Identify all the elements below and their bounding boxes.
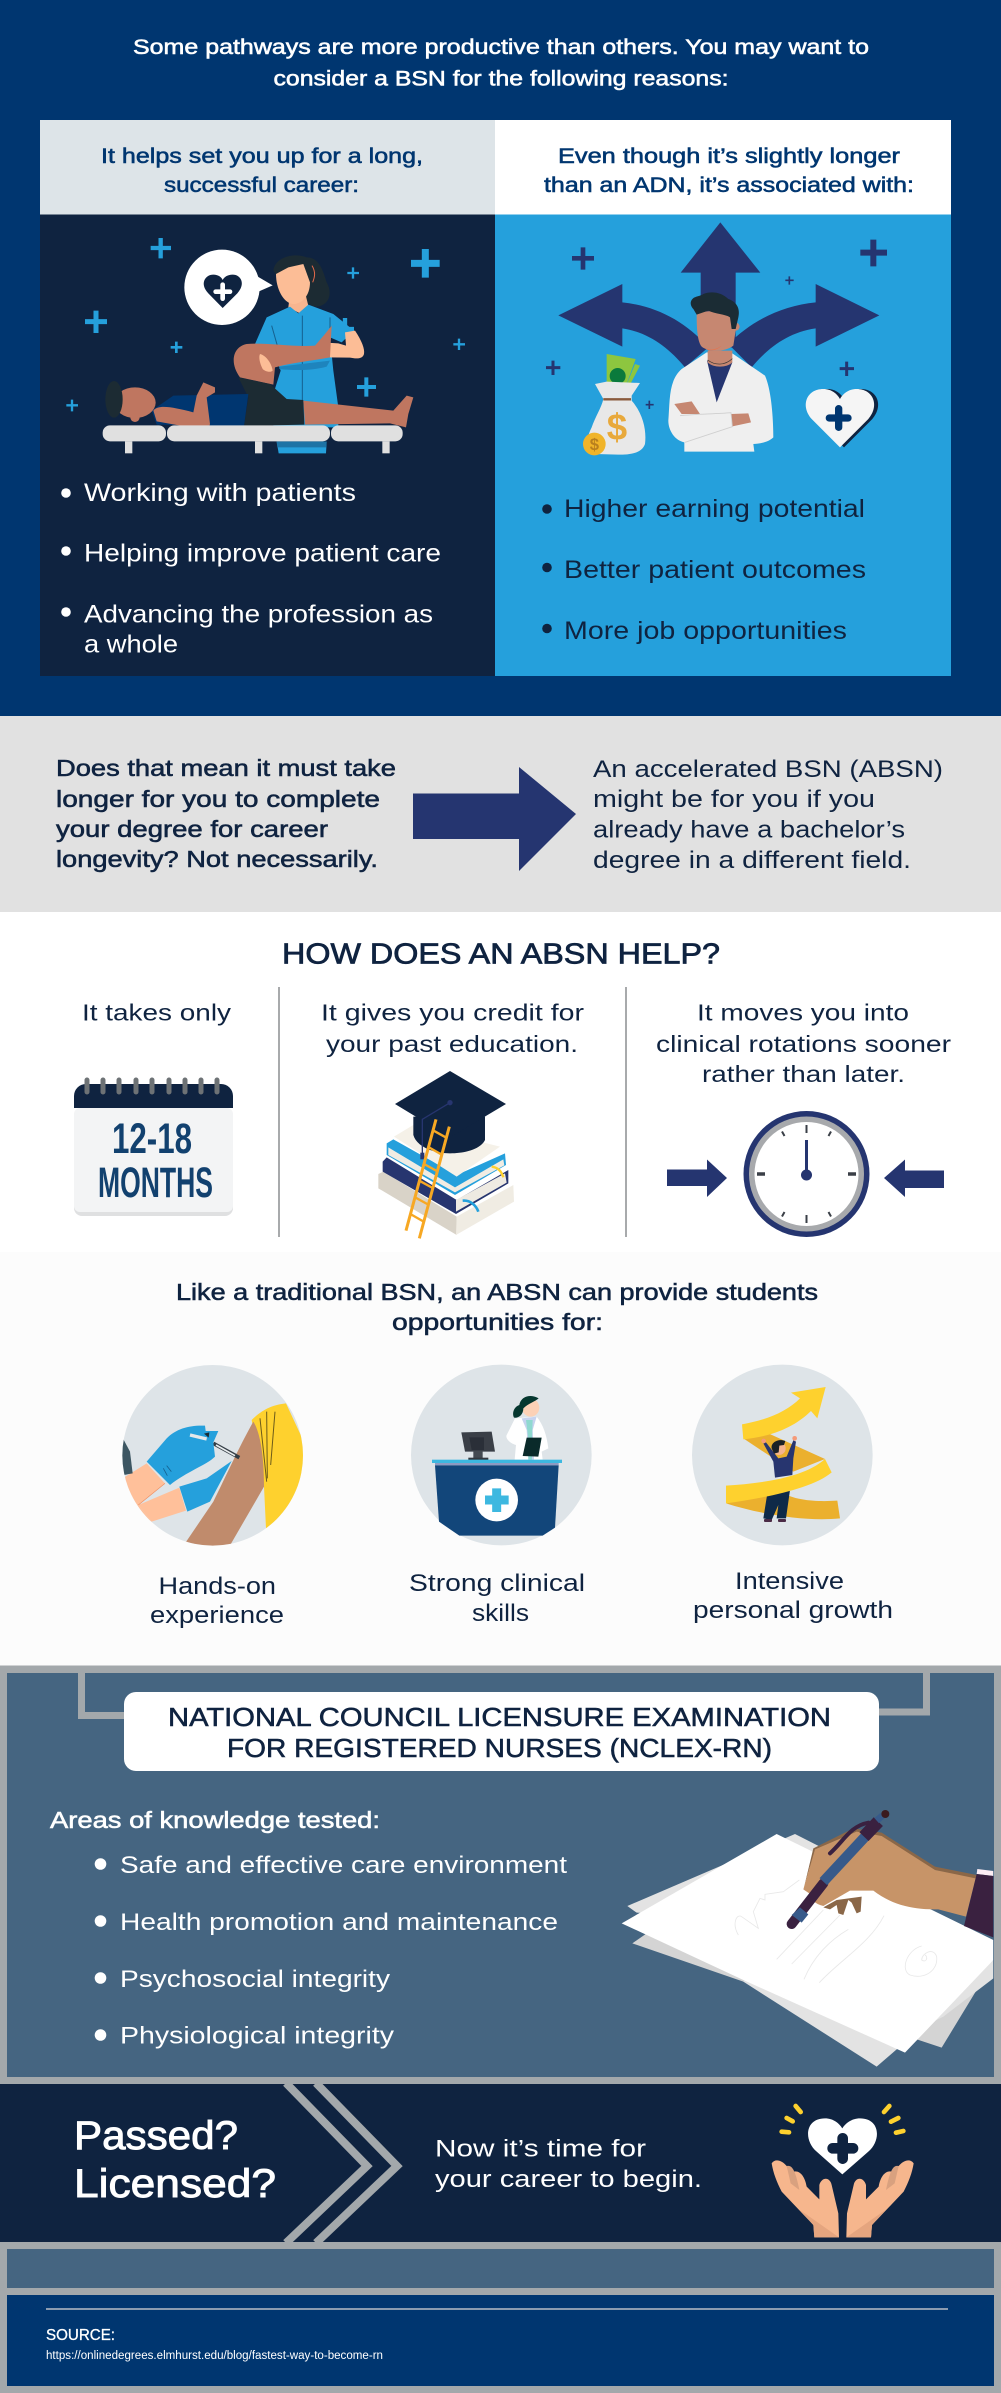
- column: clinical rotations sooner: clinical rotations sooner: [656, 1031, 951, 1057]
- label: strong clinical skills: skills: [472, 1600, 529, 1627]
- subheading: areas of knowledge: Areas of knowledge tested:: [50, 1807, 380, 1833]
- icon: money bag: [583, 354, 645, 455]
- bullet list: knowledge areas: Psychosocial integrity: [120, 1966, 391, 1993]
- question text: longer for you to complete: [56, 786, 380, 812]
- heading: passed licensed: Passed?: [74, 2114, 238, 2158]
- label: hands-on experience: experience: [150, 1602, 284, 1629]
- bullet list: knowledge areas: [95, 1852, 567, 2050]
- panel: long successful career: [40, 120, 495, 676]
- arrow: [413, 767, 576, 871]
- heading: opportunities: [176, 1279, 818, 1335]
- icon: clock with arrows: [667, 1111, 944, 1237]
- icon: money bag: $: [607, 406, 627, 447]
- label: hands-on experience: Hands-on: [158, 1573, 276, 1600]
- heading: associated with: [544, 145, 914, 197]
- answer text: might be for you if you: [593, 786, 875, 813]
- heading box: NCLEX-RN: [124, 1692, 879, 1771]
- chevrons: [286, 2083, 397, 2243]
- bullet list: BSN outcomes: More job opportunities: [564, 617, 847, 645]
- icon: graduation cap on books: [378, 1071, 514, 1238]
- doctor: [668, 292, 773, 452]
- answer text: [593, 756, 943, 874]
- panel: associated with: [495, 120, 951, 676]
- source: [46, 2327, 383, 2362]
- label: hands-on experience: [150, 1573, 284, 1629]
- heading box: NCLEX-RN: FOR REGISTERED NURSES (NCLEX-RN): [227, 1733, 772, 1763]
- icon: hands-on injection: [120, 1365, 310, 1548]
- footer band: [0, 2242, 1001, 2393]
- icon: calendar: [74, 1080, 233, 1216]
- nurse: [255, 255, 364, 453]
- answer text: already have a bachelor’s: [593, 816, 905, 844]
- icon: heart with plus: [806, 389, 878, 447]
- massage table: [103, 425, 403, 453]
- panel: ABSN opportunities: [122, 1282, 892, 1628]
- icon: clinic desk: [411, 1365, 592, 1545]
- heading box: NCLEX-RN: NATIONAL COUNCIL LICENSURE EXAMINATION: [168, 1702, 831, 1732]
- icon: calendar: MONTHS: [98, 1159, 213, 1207]
- question text: [56, 755, 396, 872]
- bullet list: BSN outcomes: Higher earning potential: [564, 495, 865, 523]
- patient: [105, 326, 413, 430]
- question text: longevity? Not necessarily.: [56, 846, 378, 872]
- bullet list: career benefits: Advancing the profession as: [84, 600, 433, 628]
- illustration: therapist with patient: [66, 238, 465, 453]
- illustration: doctor with three arrows: [546, 222, 887, 455]
- bullet list: BSN outcomes: [542, 495, 866, 645]
- panel: BSN reasons: [0, 0, 1001, 716]
- label: strong clinical skills: [409, 1570, 585, 1627]
- heading: associated with: than an ADN, it’s associated with:: [544, 174, 914, 197]
- label: intensive personal growth: Intensive: [735, 1568, 844, 1595]
- column: credit for past education: It gives you credit for: [321, 1000, 584, 1026]
- bullet list: career benefits: [61, 479, 441, 658]
- illustration: hand writing on papers: [622, 1810, 993, 2067]
- text: career begins: Now it’s time for: [435, 2136, 646, 2162]
- panel: passed and licensed: [0, 2083, 1001, 2243]
- title: BSN reasons intro: Some pathways are more productive than others. You may want to: [133, 36, 869, 59]
- label: intensive personal growth: [693, 1568, 893, 1624]
- question text: Does that mean it must take: [56, 755, 396, 781]
- column: clinical rotations sooner: [656, 1000, 951, 1237]
- bullet list: BSN outcomes: Better patient outcomes: [564, 556, 866, 584]
- heading: opportunities: opportunities for:: [392, 1309, 603, 1335]
- bullet list: knowledge areas: Physiological integrity: [120, 2022, 395, 2050]
- icon: personal growth ribbon: [692, 1365, 873, 1545]
- icon: money bag: $: [590, 435, 600, 454]
- text: career begins: your career to begin.: [435, 2166, 702, 2193]
- bullet list: knowledge areas: Health promotion and maintenance: [120, 1909, 558, 1936]
- bullet list: career benefits: Helping improve patient care: [84, 540, 441, 568]
- text: career begins: [435, 2136, 702, 2193]
- heading: long successful career: It helps set you up for a long,: [101, 145, 423, 168]
- label: strong clinical skills: Strong clinical: [409, 1570, 585, 1597]
- column: 12-18 months: It takes only: [82, 1000, 232, 1026]
- bullet list: knowledge areas: Safe and effective care environment: [120, 1852, 567, 1879]
- title: BSN reasons intro: consider a BSN for the following reasons:: [274, 68, 728, 90]
- heading: long successful career: [101, 145, 423, 197]
- column: clinical rotations sooner: rather than later.: [702, 1061, 905, 1087]
- bullet list: career benefits: a whole: [84, 630, 178, 658]
- column: 12-18 months: [74, 1000, 233, 1216]
- source: https://onlinedegrees.elmhurst.edu/blog/fastest-way-to-become-rn: [46, 2350, 383, 2362]
- heading: passed licensed: [74, 2114, 276, 2206]
- heading: long successful career: successful career:: [164, 174, 359, 197]
- icon: hands holding heart: [772, 2106, 914, 2237]
- heading: passed licensed: Licensed?: [74, 2162, 276, 2206]
- icon: calendar: 12-18: [112, 1115, 192, 1163]
- question text: your degree for career: [56, 816, 328, 842]
- panel: accelerated BSN callout: [0, 716, 1001, 912]
- answer text: An accelerated BSN (ABSN): [593, 756, 943, 783]
- icon: three direction arrows: [558, 222, 879, 367]
- bullet list: career benefits: Working with patients: [84, 479, 356, 507]
- column: clinical rotations sooner: It moves you into: [697, 1000, 909, 1026]
- icon: speech bubble with heart: [184, 250, 273, 325]
- title: BSN reasons intro: [133, 36, 869, 90]
- heading: associated with: Even though it’s slightly longer: [558, 145, 900, 168]
- answer text: degree in a different field.: [593, 847, 911, 874]
- source: SOURCE:: [46, 2327, 115, 2344]
- label: intensive personal growth: personal growth: [693, 1597, 893, 1624]
- panel: NCLEX-RN: [0, 1666, 1001, 2084]
- column: credit for past education: your past education.: [326, 1031, 578, 1057]
- heading: how does an ABSN help: HOW DOES AN ABSN HELP?: [282, 938, 720, 970]
- column: credit for past education: [321, 1000, 584, 1238]
- heading: opportunities: Like a traditional BSN, an ABSN can provide students: [176, 1279, 818, 1305]
